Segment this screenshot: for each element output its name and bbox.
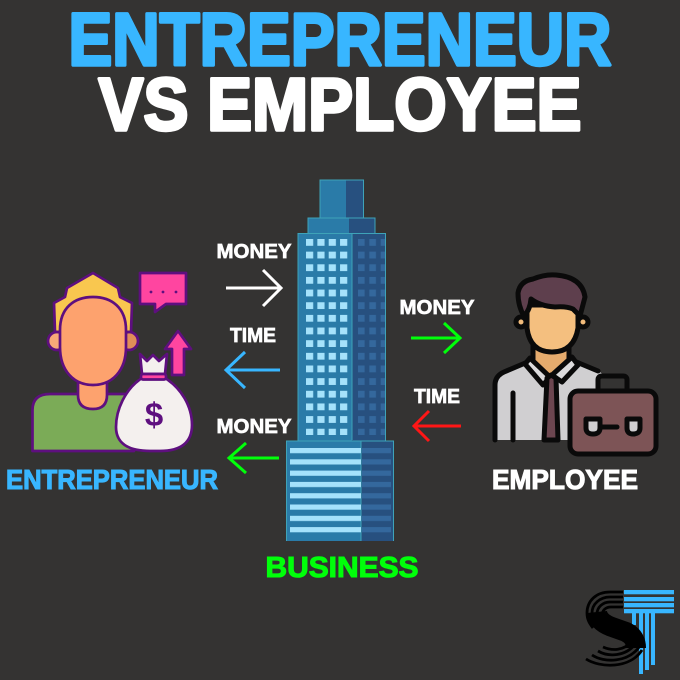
icon: left ear [48, 332, 66, 350]
icon: face [60, 297, 126, 385]
label: money to employee: MONEY [400, 297, 475, 319]
icon: hair [518, 275, 585, 316]
icon: shirt [32, 394, 134, 451]
building base [286, 441, 394, 541]
icon: bubble dots [150, 291, 177, 293]
label: time to entrepreneur: TIME [230, 325, 276, 347]
icon: money bag tie [141, 374, 166, 380]
icon: right collar [552, 357, 578, 382]
building second tier [308, 218, 375, 234]
logo: S letter [586, 592, 642, 665]
icon: right ear [578, 317, 588, 327]
icon: up arrow [165, 331, 191, 375]
arrow: white right [226, 270, 281, 306]
icon: left ear [516, 317, 526, 327]
logo: T letter [624, 590, 674, 674]
label: business: BUSINESS [266, 552, 418, 584]
label: time to business: TIME [414, 386, 460, 408]
icon: left clasp [586, 419, 600, 434]
icon: neck [78, 375, 107, 409]
icon: entrepreneur [32, 273, 192, 451]
icon: right ear [120, 332, 138, 350]
label: entrepreneur: ENTREPRENEUR [6, 464, 218, 495]
icon: briefcase handle [598, 376, 627, 392]
arrow: green left [229, 443, 279, 473]
label: employee: EMPLOYEE [492, 464, 638, 495]
arrow: red left [414, 411, 461, 441]
icon: speech bubble [140, 273, 186, 312]
title: entrepreneur: ENTREPRENEUR [68, 0, 612, 81]
icon: briefcase [570, 391, 656, 454]
building [286, 180, 394, 541]
title: vs employee: VS EMPLOYEE [98, 63, 582, 146]
building tower [298, 234, 386, 441]
icon: left collar [525, 358, 550, 385]
icon: right clasp [627, 419, 640, 434]
logo [586, 590, 674, 674]
icon: employee [495, 275, 656, 454]
icon: crown of money bag [140, 354, 167, 374]
label: money to business: MONEY [216, 241, 292, 263]
arrow: green right [411, 323, 460, 353]
icon: head [527, 305, 578, 352]
icon: shirt fill [495, 360, 606, 440]
label: money to entrepreneur: MONEY [216, 416, 292, 438]
icon: tie [544, 375, 558, 440]
icon: briefcase clasp line [600, 424, 617, 430]
icon: dollar sign: $ [145, 396, 163, 433]
icon: money bag [116, 378, 192, 451]
icon: hair [54, 273, 132, 332]
arrow: blue left [226, 352, 280, 388]
building top [320, 180, 364, 218]
icon: shirt outline [495, 361, 598, 440]
icon: neck [533, 345, 569, 378]
